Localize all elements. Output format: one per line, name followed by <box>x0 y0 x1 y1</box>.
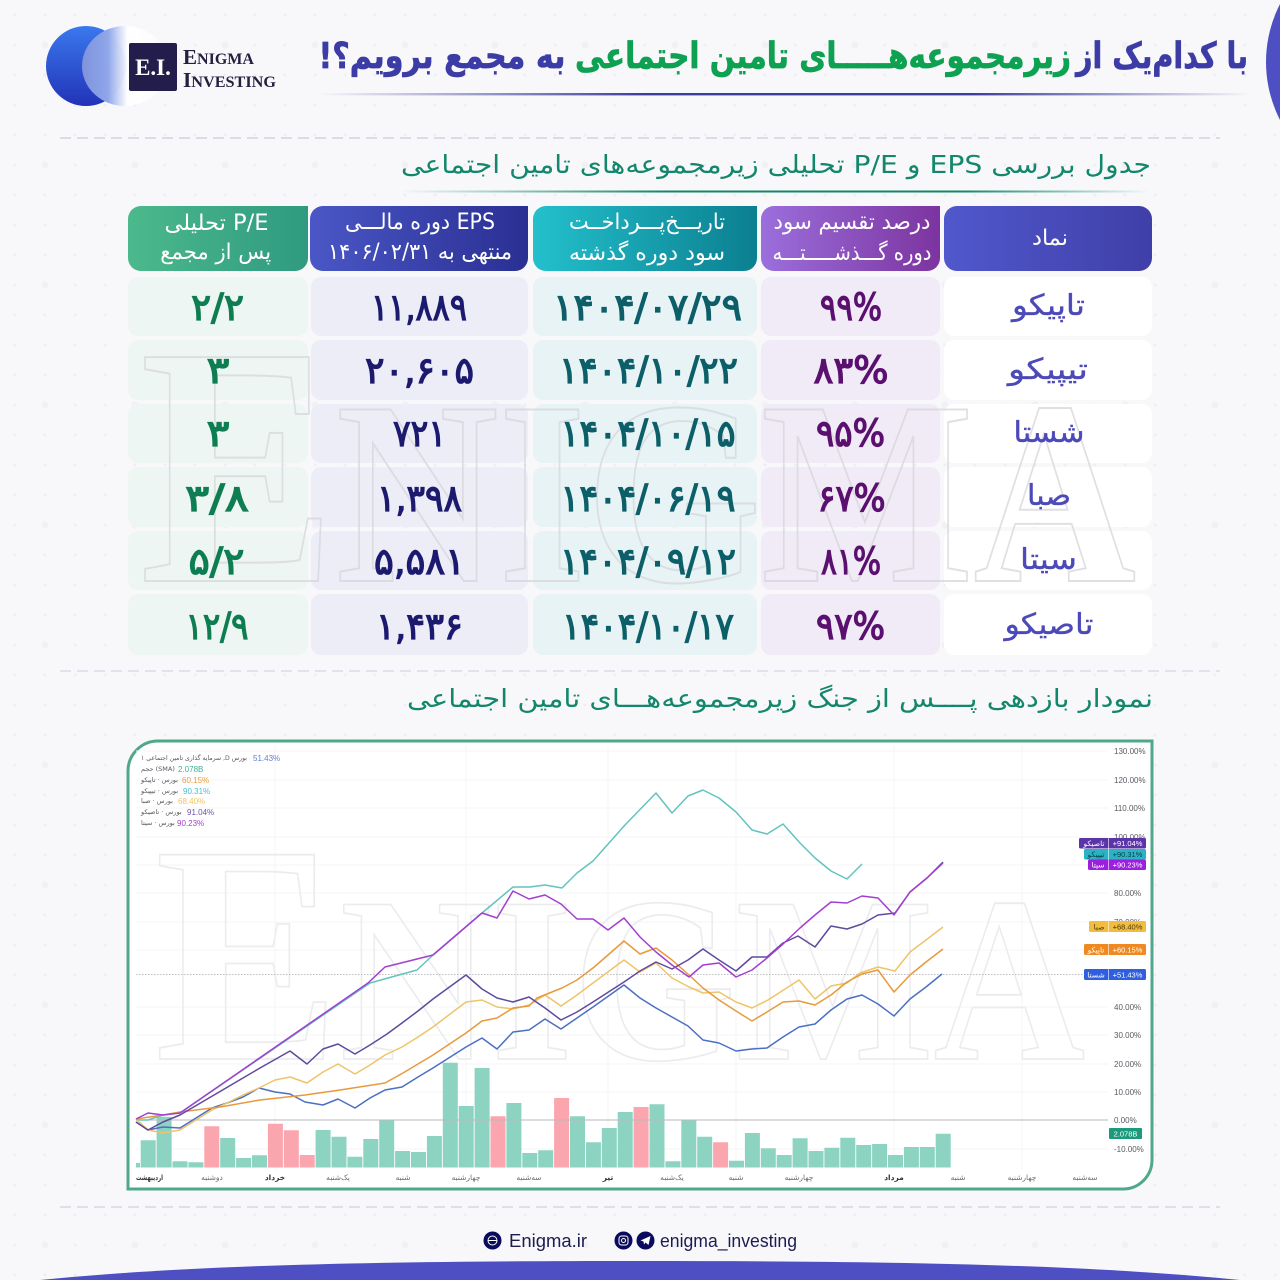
column: symbols: سیتا <box>1020 542 1077 576</box>
header: P/E <box>128 206 308 271</box>
tag: tasico <box>1079 838 1146 848</box>
column: dividend percent: ۹۹% <box>820 286 882 329</box>
header: EPS <box>310 206 528 271</box>
tag: tapico: +60.15% <box>1113 946 1143 954</box>
line series: shasta (blue) <box>136 974 942 1130</box>
watermark: chart: ENIGMA <box>155 782 1085 1127</box>
column: payment dates: ۱۴۰۴/۱۰/۱۵ <box>560 412 736 455</box>
header: payment date: تاریـــخ‌پـــرداخــت <box>569 210 725 235</box>
column: P/E values: ۱۲/۹ <box>186 605 248 648</box>
title <box>318 36 1248 77</box>
column: payment dates <box>553 286 742 648</box>
x axis labels: چهارشنبه <box>785 1173 814 1182</box>
footer contacts: Enigma.ir <box>509 1231 587 1251</box>
header: dividend percent: دوره گـــذشـــــتـــه <box>772 240 932 266</box>
chart legend: 51.43% <box>253 754 280 763</box>
header: dividend percent <box>761 206 940 271</box>
column: payment dates: ۱۴۰۴/۰۶/۱۹ <box>560 477 736 520</box>
chart legend: بورس · تیپیکو <box>140 787 178 795</box>
chart legend: 91.04% <box>187 808 214 817</box>
line series: saba (yellow) <box>136 927 943 1133</box>
chart legend: 60.15% <box>182 776 209 785</box>
column: symbols <box>1002 288 1094 641</box>
y axis labels: 120.00% <box>1114 776 1146 785</box>
heading: table: جدول بررسی EPS و P/E تحلیلی زیرمجموعه‌های تامین اجتماعی <box>401 150 1151 180</box>
icon: crescent moon <box>46 26 168 106</box>
column: P/E values: ۲/۲ <box>191 286 244 329</box>
column: P/E values: ۳/۸ <box>185 477 249 520</box>
column: symbols: تاصیکو <box>1002 607 1094 641</box>
footer contacts: enigma_investing <box>660 1231 797 1252</box>
baselines <box>136 1119 1108 1121</box>
y axis labels: -10.00% <box>1114 1145 1144 1154</box>
y axis labels: 100.00% <box>1114 833 1146 842</box>
x axis labels: یک‌شنبه <box>660 1173 684 1182</box>
tag: tapico: تاپیکو <box>1087 946 1104 954</box>
x axis labels: شنبه <box>729 1173 743 1182</box>
header: EPS: EPS دوره مالـــی <box>345 210 495 235</box>
x axis labels: شنبه <box>951 1173 965 1182</box>
header: P/E: پس از مجمع <box>160 240 271 265</box>
column: payment dates: ۱۴۰۴/۰۹/۱۲ <box>560 540 736 583</box>
logo: Enigma Investing: ENIGMA <box>183 45 254 69</box>
chart frame <box>128 741 1152 1189</box>
chart legend: ۱ سرمایه گذاری تامین اجتماعی ,D بورس <box>141 754 247 762</box>
tag: tapico <box>1084 944 1146 955</box>
table <box>128 206 1152 655</box>
tag: shasta: شستا <box>1087 970 1105 980</box>
x axis labels: سه‌شنبه <box>516 1173 542 1182</box>
tag: sita: +90.23% <box>1113 860 1143 870</box>
column: EPS values: ۷۲۱ <box>393 412 446 455</box>
table header row <box>128 206 1152 271</box>
x axis labels: چهارشنبه <box>452 1173 481 1182</box>
column: dividend percent: ۸۱% <box>821 540 881 583</box>
x axis labels: اردیبهشت <box>136 1173 163 1182</box>
column: EPS values: ۱,۴۳۶ <box>376 605 463 648</box>
tag: sita <box>1088 860 1146 870</box>
panel: returns chart <box>128 741 1152 1189</box>
footer contacts <box>484 1231 797 1252</box>
decorative band: bottom <box>40 1261 1240 1280</box>
x axis labels: خرداد <box>265 1173 285 1182</box>
chart legend: بورس · صبا <box>141 797 173 805</box>
icon: telegram <box>636 1232 654 1250</box>
title: زیرمجموعه‌هـــــای تامین اجتماعی <box>575 36 1071 77</box>
tag: saba: صبا <box>1094 922 1104 932</box>
decorative arc: top right <box>1266 0 1280 189</box>
chart legend: بورس · تاپیکو <box>140 776 178 784</box>
x axis labels: مرداد <box>884 1173 904 1182</box>
x axis labels: سه‌شنبه <box>1072 1173 1098 1182</box>
column: P/E values <box>185 286 249 648</box>
tag: saba <box>1089 921 1146 932</box>
column: EPS values: ۵,۵۸۱ <box>374 540 465 583</box>
y axis labels: 40.00% <box>1114 1003 1141 1012</box>
line series: tapico (orange) <box>136 941 943 1119</box>
column: P/E values: ۳ <box>206 412 230 455</box>
header: EPS: منتهی به ۱۴۰۶/۰۲/۳۱ <box>328 240 512 265</box>
column: dividend percent: ۹۵% <box>816 412 885 455</box>
column: P/E values: ۳ <box>206 349 230 392</box>
column: dividend percent: ۹۷% <box>816 605 885 648</box>
title: به مجمع برویم؟! <box>318 36 566 77</box>
x axis labels: یک‌شنبه <box>326 1173 350 1182</box>
volume bars <box>138 1063 943 1168</box>
y axis labels: 110.00% <box>1114 804 1145 813</box>
line series: tasico (dark purple) <box>136 862 943 1130</box>
x axis labels: تیر <box>602 1173 613 1182</box>
x axis labels: چهارشنبه <box>1008 1173 1037 1182</box>
column: EPS values: ۱,۳۹۸ <box>377 477 462 520</box>
header: dividend percent: درصد تقسیم سود <box>774 210 930 235</box>
tag: shasta: +51.43% <box>1113 970 1143 980</box>
header: P/E: P/E تحلیلی <box>164 211 268 236</box>
tag: volume: 2.078B <box>1114 1130 1137 1138</box>
column: EPS values: ۲۰,۶۰۵ <box>365 349 474 392</box>
line series: sita (violet) <box>136 863 943 1119</box>
column: EPS values: ۱۱,۸۸۹ <box>371 286 467 329</box>
logo: Enigma Investing <box>46 26 277 106</box>
x axis labels: دوشنبه <box>201 1173 223 1182</box>
tag: tipico <box>1084 849 1146 860</box>
logo: Enigma Investing: E.I. <box>135 55 171 80</box>
y axis labels: 30.00% <box>1114 1031 1141 1040</box>
header: payment date: سود دوره گذشته <box>569 240 725 266</box>
y axis labels: 80.00% <box>1114 889 1141 898</box>
column: symbols: شستا <box>1014 415 1084 449</box>
column: P/E values: ۵/۲ <box>188 540 244 583</box>
heading: chart: نمودار بازدهی پــــس از جنگ زیرمجموعه‌هـــای تامین اجتماعی <box>407 684 1153 713</box>
chart legend <box>140 754 280 828</box>
y axis labels: 20.00% <box>1114 1060 1141 1069</box>
column: symbols: تیپیکو <box>1006 352 1088 387</box>
header: payment date <box>533 206 757 271</box>
watermark: table: ENIGMA <box>140 276 1136 655</box>
column: payment dates: ۱۴۰۴/۱۰/۱۷ <box>562 605 734 648</box>
tag: tipico: +90.31% <box>1113 850 1143 859</box>
x axis labels <box>136 1173 1098 1182</box>
column: symbols: تاپیکو <box>1010 288 1085 323</box>
line series: tipico (cyan) <box>136 790 862 1120</box>
logo: Enigma Investing: INVESTING <box>183 68 277 92</box>
chart legend: 2.078B <box>178 765 203 774</box>
tag: volume <box>1109 1128 1142 1139</box>
tag: sita: سیتا <box>1091 860 1105 870</box>
chart legend: حجم (SMA) <box>141 765 175 773</box>
y axis labels <box>1114 747 1146 1154</box>
y axis labels: 0.00% <box>1114 1116 1137 1125</box>
column: dividend percent: ۶۷% <box>818 477 886 520</box>
y axis labels: 70.00% <box>1114 918 1141 927</box>
x axis labels: شنبه <box>396 1173 410 1182</box>
tag: shasta <box>1084 969 1146 980</box>
header: symbol: نماد <box>1032 226 1068 251</box>
icon: instagram <box>614 1232 632 1250</box>
tag: saba: +68.40% <box>1113 922 1143 932</box>
column: dividend percent: ۸۳% <box>814 349 888 392</box>
icon: website globe <box>484 1232 502 1250</box>
column: payment dates: ۱۴۰۴/۱۰/۲۲ <box>559 349 738 392</box>
chart legend: 90.31% <box>183 787 210 796</box>
column: dividend percent <box>814 286 888 648</box>
chart legend: بورس · سیتا <box>141 819 175 827</box>
y axis labels: 10.00% <box>1114 1088 1141 1097</box>
column: EPS values <box>365 286 474 648</box>
column: payment dates: ۱۴۰۴/۰۷/۲۹ <box>553 286 742 329</box>
header: symbol <box>944 206 1152 271</box>
tag: tasico: تاصیکو <box>1082 839 1105 848</box>
price tags <box>1079 838 1146 1139</box>
chart legend: بورس · تاصیکو <box>140 808 182 816</box>
tag: tipico: تیپیکو <box>1087 850 1104 859</box>
y axis labels: 130.00% <box>1114 747 1146 756</box>
table cell backgrounds <box>128 277 1152 655</box>
tag: tasico: +91.04% <box>1113 839 1143 848</box>
column: symbols: صبا <box>1027 478 1071 512</box>
chart legend: 90.23% <box>177 819 204 828</box>
chart legend: 68.40% <box>178 797 205 806</box>
